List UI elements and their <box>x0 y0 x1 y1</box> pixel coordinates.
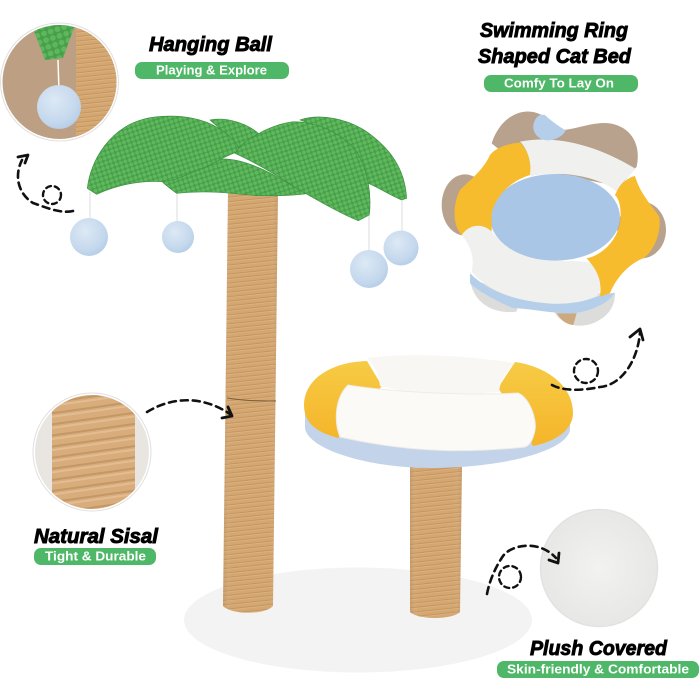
blue tab <box>533 115 566 140</box>
wood backdrop <box>442 111 666 258</box>
pill: Comfy To Lay On <box>484 75 638 92</box>
pill: Tight & Durable: Tight & Durable <box>45 550 146 564</box>
white upper ring section <box>520 139 635 192</box>
yellow ring ends <box>304 361 382 438</box>
pill: Playing & Explore: Playing & Explore <box>156 64 267 78</box>
left leaf <box>87 116 239 194</box>
lower middle leaf <box>162 159 308 196</box>
heading: Natural Sisal: Natural Sisal <box>34 526 158 548</box>
back leaf <box>210 119 258 148</box>
dashed arrow to hanging ball <box>18 155 73 212</box>
heading: Swimming Ring Shaped Cat Bed <box>478 20 632 68</box>
pill: Skin-friendly & Comfortable <box>497 661 699 678</box>
palm leaf crown <box>87 116 407 221</box>
blue stripe on lower ring <box>470 273 615 314</box>
dashed arrow to plush circle <box>487 546 559 594</box>
hanging pom-pom balls <box>70 218 418 288</box>
white lower ring section <box>462 225 600 304</box>
tall sisal trunk <box>223 190 278 613</box>
round plush base <box>184 568 532 672</box>
right leaf <box>235 122 370 221</box>
detail circle: sisal rope <box>32 392 152 512</box>
heading: Swimming Ring Shaped Cat Bed: Swimming Ring <box>480 20 628 42</box>
dashed arrow to trunk <box>147 400 232 418</box>
feature: natural sisal <box>32 392 232 565</box>
feature: plush covered <box>487 510 699 678</box>
swimming ring bed on platform <box>304 355 573 468</box>
small tan lobe detail <box>557 313 577 325</box>
white back of ring <box>367 355 515 394</box>
short sisal post <box>410 465 462 618</box>
detail circle: plush fabric <box>540 510 658 626</box>
ball strings <box>90 192 402 254</box>
pill: Playing & Explore <box>135 62 289 79</box>
heading: Swimming Ring Shaped Cat Bed: Shaped Cat Bed <box>478 46 632 68</box>
heading: Plush Covered: Plush Covered <box>530 638 668 660</box>
right yellow section <box>587 176 660 297</box>
feature: hanging ball <box>0 20 289 212</box>
heading: Hanging Ball: Hanging Ball <box>149 34 272 56</box>
top view of ring bed <box>442 111 666 326</box>
dashed arrow to ring bed <box>552 329 643 390</box>
pill: Comfy To Lay On: Comfy To Lay On <box>504 76 614 90</box>
pill: Skin-friendly & Comfortable: Skin-friendly & Comfortable <box>507 662 689 676</box>
far right leaf <box>300 117 407 200</box>
cat tree product <box>70 116 573 673</box>
blue platform <box>305 410 570 468</box>
detail circle: hanging ball <box>0 20 120 145</box>
inner blue cushion <box>490 174 620 261</box>
pill: Tight & Durable <box>34 548 156 565</box>
grey lobes below <box>470 278 615 326</box>
white front of ring <box>336 385 535 451</box>
feature: swimming ring bed <box>442 20 666 390</box>
left yellow section <box>455 143 530 235</box>
